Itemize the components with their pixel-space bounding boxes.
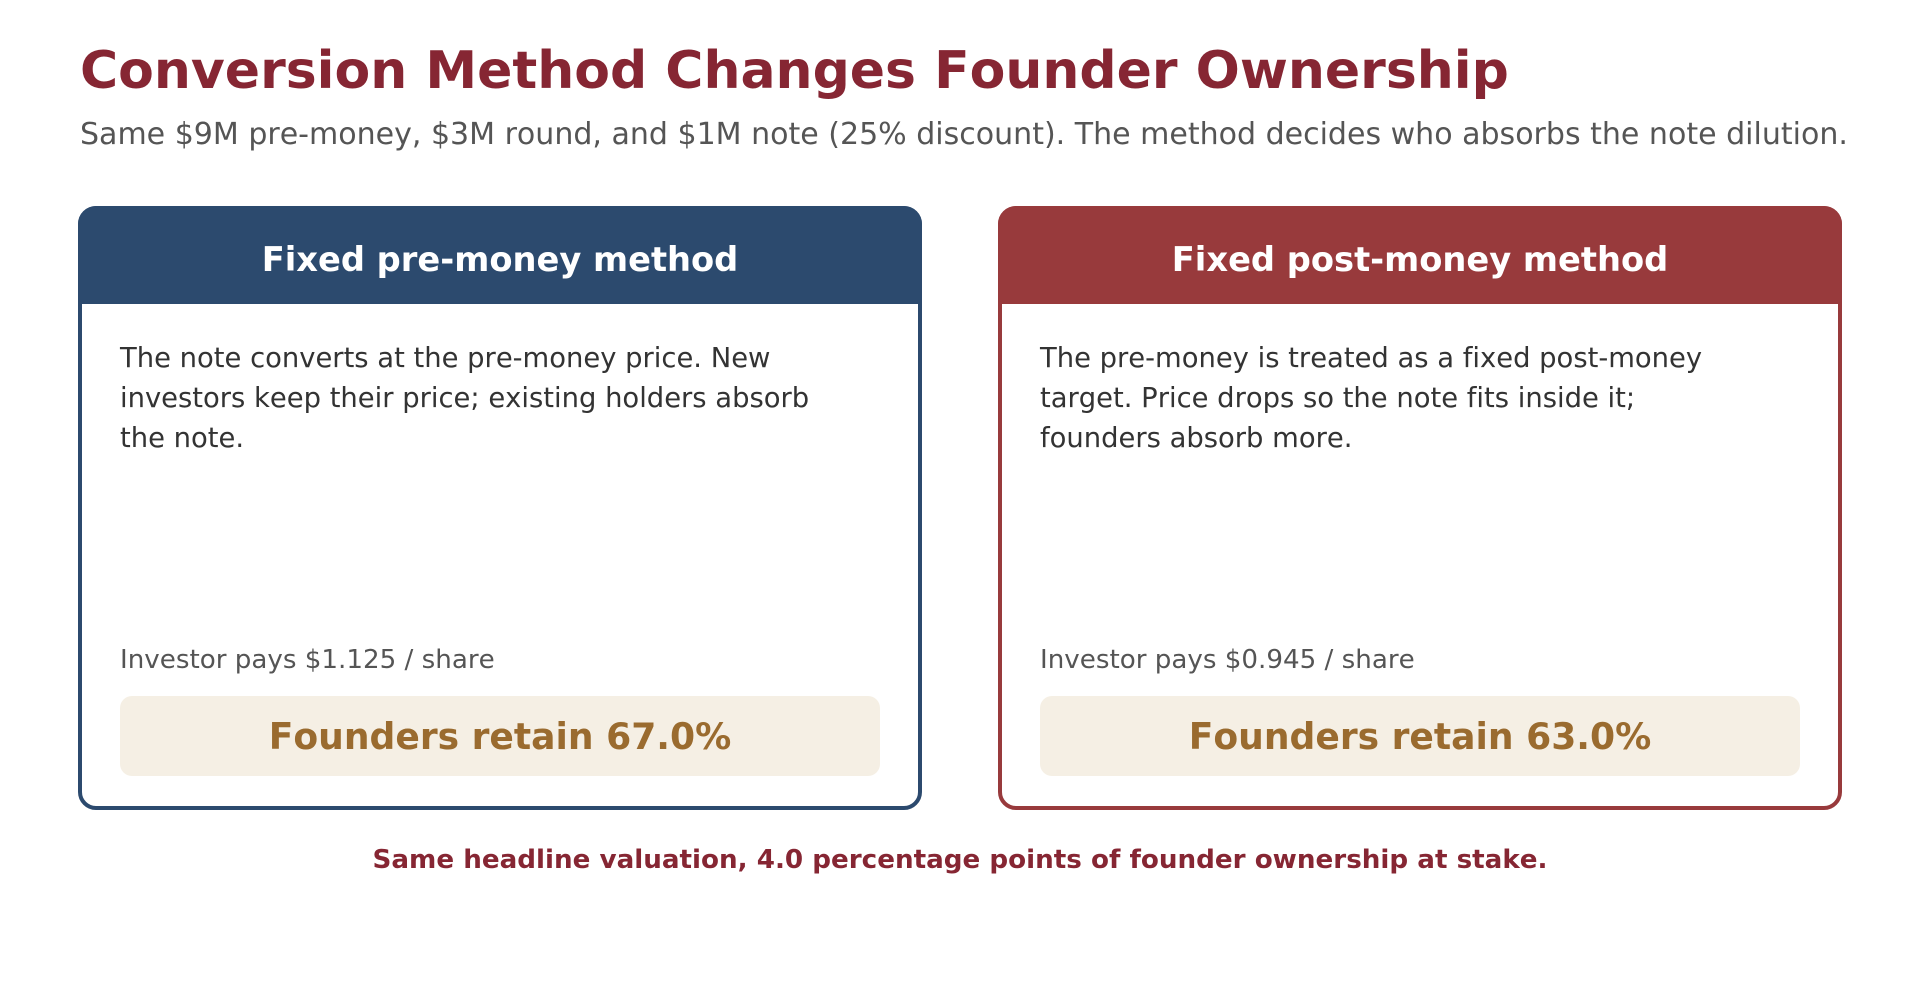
- description: pre-money: [120, 343, 809, 454]
- description: post-money: target. Price drops so the note fits inside it;: [1040, 383, 1635, 414]
- description: pre-money: the note.: [120, 423, 244, 454]
- panel header: pre-money: [78, 206, 922, 304]
- investor price: post-money: Investor pays $0.945 / share: [1040, 645, 1415, 675]
- panel header: post-money: Fixed post-money method: [1172, 240, 1668, 279]
- result box: pre-money: [120, 696, 880, 776]
- subtitle: Same $9M pre-money, $3M round, and $1M note (25% discount). The method decides who absorbs the note dilution.: [80, 117, 1848, 152]
- panel: fixed pre-money method: [78, 206, 922, 810]
- description: pre-money: investors keep their price; existing holders absorb: [120, 383, 809, 414]
- description: post-money: The pre-money is treated as a fixed post-money: [1040, 343, 1702, 374]
- result box: post-money: [1040, 696, 1800, 776]
- panel header: pre-money: Fixed pre-money method: [262, 240, 738, 279]
- result box: post-money: Founders retain 63.0%: [1189, 716, 1651, 758]
- description: post-money: [1040, 343, 1702, 454]
- panel header: post-money: [998, 206, 1842, 304]
- footer takeaway: Same headline valuation, 4.0 percentage points of founder ownership at stake.: [373, 845, 1547, 875]
- panel: fixed post-money method: [998, 206, 1842, 810]
- description: post-money: founders absorb more.: [1040, 423, 1352, 454]
- investor price: pre-money: Investor pays $1.125 / share: [120, 645, 495, 675]
- description: pre-money: The note converts at the pre-money price. New: [120, 343, 770, 374]
- result box: pre-money: Founders retain 67.0%: [269, 716, 731, 758]
- title: Conversion Method Changes Founder Ownership: [80, 41, 1509, 101]
